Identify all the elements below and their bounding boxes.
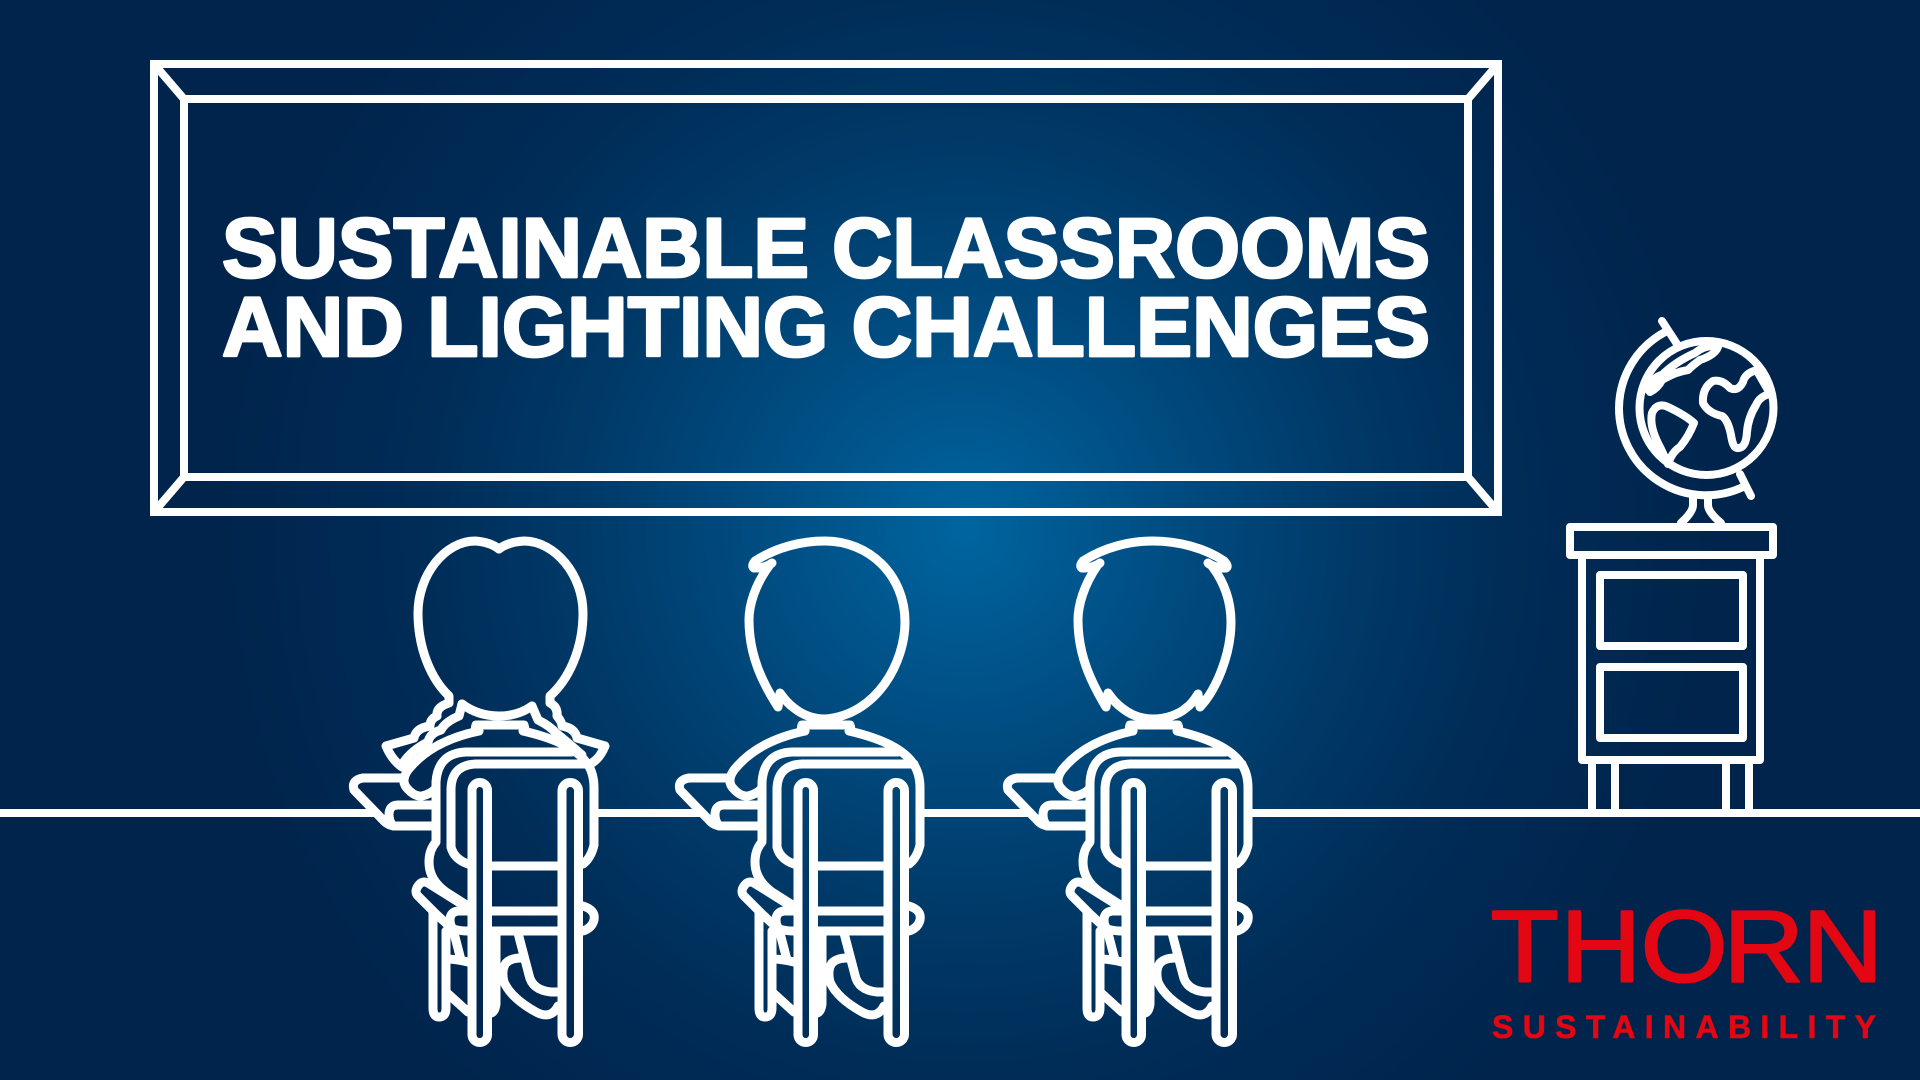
title: SUSTAINABLE CLASSROOMS xyxy=(222,201,1430,295)
student: boy, middle xyxy=(679,541,920,1042)
student: boy, right xyxy=(1007,541,1248,1042)
title: AND LIGHTING CHALLENGES xyxy=(222,280,1430,374)
icon: globe xyxy=(1619,321,1774,523)
cabinet xyxy=(1570,527,1773,813)
title xyxy=(222,201,1430,374)
logo: Thorn Sustainability: SUSTAINABILITY xyxy=(1492,1009,1876,1045)
panel: blackboard frame xyxy=(154,64,1498,512)
student: girl with braids xyxy=(353,541,605,1042)
floor line xyxy=(0,809,1920,817)
logo: Thorn Sustainability: THORN xyxy=(1491,889,1883,1003)
